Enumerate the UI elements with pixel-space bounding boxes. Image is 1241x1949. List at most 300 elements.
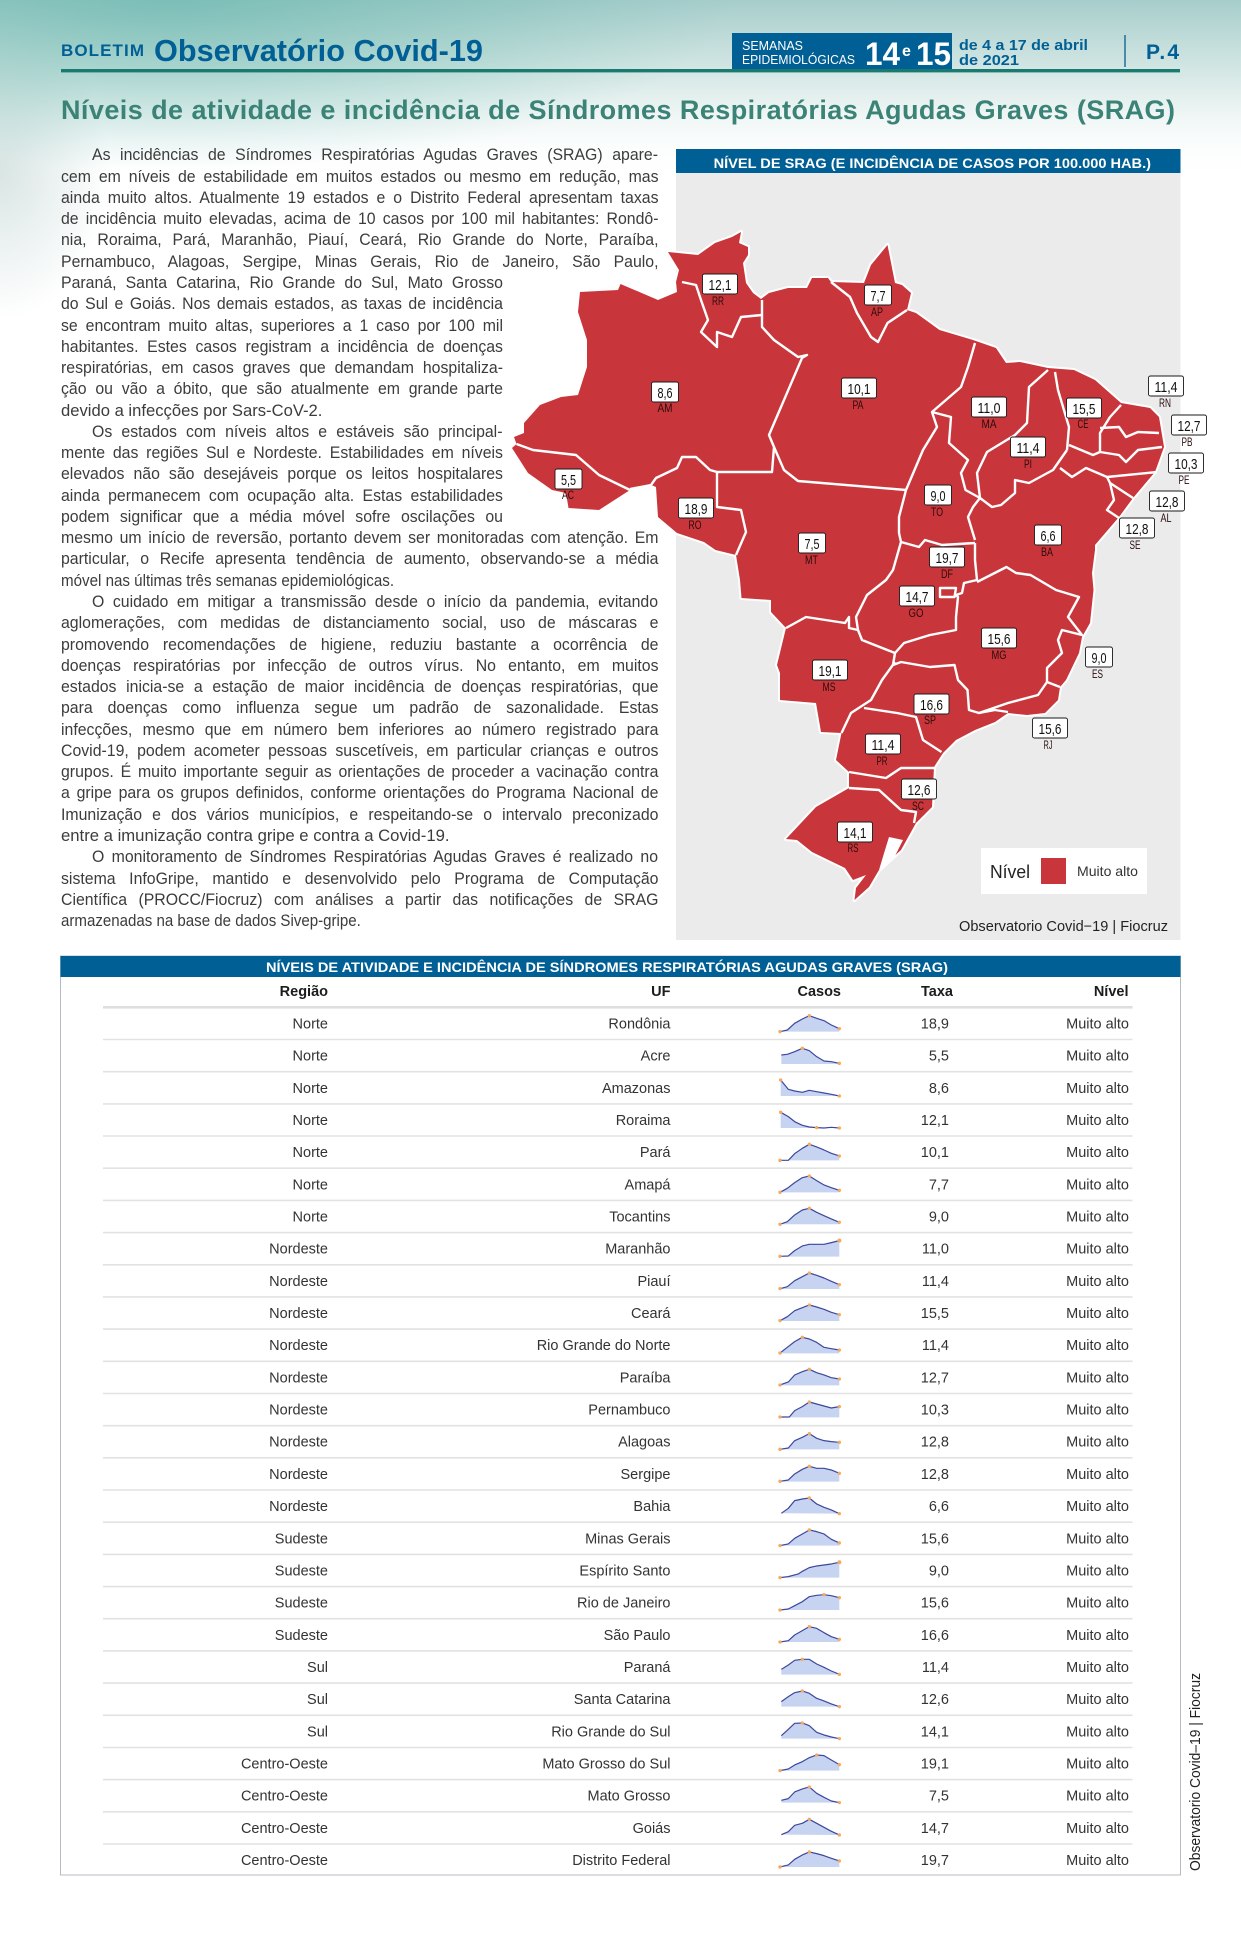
row: Acre: Acre bbox=[641, 1049, 670, 1065]
row: Goiás: Centro-Oeste bbox=[241, 1821, 328, 1837]
row: Tocantins: Tocantins bbox=[609, 1210, 670, 1226]
sparkline: Rondônia bbox=[778, 1014, 841, 1033]
row: Roraima: Roraima bbox=[616, 1113, 671, 1129]
state label: MT bbox=[798, 533, 826, 567]
body text: Pernambuco, Alagoas, Sergipe, Minas Gerais, Rio de Janeiro, São Paulo, bbox=[60, 253, 658, 271]
epidemiological weeks box: 15 bbox=[916, 36, 951, 72]
row: Alagoas bbox=[103, 1432, 1132, 1458]
body text: Imunização e dos vários municípios, e respeitando-se o intervalo preconizado bbox=[60, 806, 658, 824]
sparkline: Paraná bbox=[781, 1658, 841, 1676]
row: Pará: Pará bbox=[640, 1145, 671, 1161]
row: Roraima: Norte bbox=[293, 1113, 328, 1129]
map legend: Nível bbox=[990, 862, 1030, 882]
row: Paraná: Paraná bbox=[624, 1660, 671, 1676]
state label: PE bbox=[1168, 453, 1204, 487]
row: Paraná: 11,4 bbox=[922, 1660, 949, 1676]
sparkline: Mato Grosso do Sul bbox=[778, 1753, 841, 1772]
state label: AC: AC bbox=[562, 488, 574, 502]
row: Piauí: 11,4 bbox=[922, 1274, 949, 1290]
state label: SC bbox=[902, 779, 936, 813]
row: Rio Grande do Sul: Muito alto bbox=[1066, 1724, 1129, 1740]
body text: armazenadas na base de dados Sivep-gripe. bbox=[60, 912, 360, 930]
row: Piauí: Muito alto bbox=[1066, 1274, 1129, 1290]
row: Paraná: Muito alto bbox=[1066, 1660, 1129, 1676]
state label: RJ: 15,6 bbox=[1038, 721, 1062, 738]
sparkline: Bahia bbox=[781, 1496, 841, 1515]
row: Alagoas: Nordeste bbox=[269, 1435, 328, 1451]
body text: particular, o Recife apresenta tendência de aumento, observando-se a média bbox=[60, 550, 658, 568]
row: Maranhão bbox=[103, 1239, 1132, 1265]
masthead bbox=[61, 33, 1180, 72]
row: Amazonas: Norte bbox=[293, 1081, 328, 1097]
body text: móvel nas últimas três semanas epidemiológicas. bbox=[60, 572, 394, 590]
row: Ceará: Nordeste bbox=[269, 1306, 328, 1322]
dates bbox=[959, 37, 1088, 69]
sparkline: Paraíba bbox=[778, 1368, 841, 1387]
epidemiological weeks box: SEMANAS bbox=[742, 39, 803, 53]
row: Tocantins: 9,0 bbox=[929, 1210, 949, 1226]
body text: cem em níveis de estabilidade em muitos estados ou mesmo em redução, mas bbox=[60, 168, 658, 186]
row: Rio de Janeiro: Sudeste bbox=[275, 1596, 328, 1612]
row: Rio Grande do Sul bbox=[103, 1721, 1132, 1748]
state label: MG bbox=[982, 628, 1016, 662]
row: Minas Gerais: Muito alto bbox=[1066, 1531, 1129, 1547]
state label: AL: 12,8 bbox=[1156, 494, 1178, 511]
row: Pará: Muito alto bbox=[1066, 1145, 1129, 1161]
sparkline: Acre bbox=[781, 1047, 841, 1065]
row: Rondônia bbox=[103, 1014, 1132, 1040]
state label: AM: AM bbox=[658, 401, 673, 415]
row: São Paulo bbox=[103, 1625, 1132, 1651]
state label: RO: 18,9 bbox=[684, 501, 708, 518]
state label: PR: PR bbox=[876, 754, 888, 768]
row: Amapá bbox=[103, 1174, 1132, 1200]
state label: PR: 11,4 bbox=[872, 737, 894, 754]
state label: GO: 14,7 bbox=[906, 589, 928, 606]
state label: RN: 11,4 bbox=[1154, 379, 1178, 396]
body text: devido a infecções por Sars-CoV-2. bbox=[60, 402, 322, 420]
state label: RR bbox=[702, 274, 738, 308]
row: Minas Gerais bbox=[103, 1528, 1132, 1554]
sparkline: São Paulo bbox=[778, 1625, 841, 1644]
body text: estados inicia-se a estação de maior incidência de doenças respiratórias, que bbox=[60, 678, 658, 696]
state label: PA: 10,1 bbox=[848, 381, 870, 398]
row: Santa Catarina bbox=[103, 1689, 1132, 1715]
sparkline: Piauí bbox=[778, 1271, 841, 1290]
row: Rio Grande do Norte bbox=[103, 1336, 1132, 1361]
row: Amazonas: Muito alto bbox=[1066, 1081, 1129, 1097]
state label: RN: RN bbox=[1159, 396, 1171, 410]
state label: DF bbox=[930, 547, 964, 581]
epidemiological weeks box: EPIDEMIOLÓGICAS bbox=[742, 52, 855, 67]
state label: PE: 10,3 bbox=[1174, 456, 1198, 473]
state label: AP bbox=[864, 285, 892, 319]
row: Sergipe: 12,8 bbox=[921, 1467, 949, 1483]
row: Roraima bbox=[103, 1111, 1132, 1136]
state label: MT: MT bbox=[805, 553, 819, 567]
body text: elevados não são desejáveis porque os leitos hospitalares bbox=[60, 465, 502, 483]
row: Tocantins: Norte bbox=[293, 1210, 328, 1226]
body text: As incidências de Síndromes Respiratórias Agudas Graves (SRAG) apare- bbox=[92, 146, 658, 164]
body text: se encontram muito altas, superiores a 1 caso por 100 mil bbox=[60, 316, 502, 334]
state label: AP: 7,7 bbox=[870, 288, 886, 305]
state label: AL: AL bbox=[1160, 511, 1172, 525]
page number: P.4 bbox=[1146, 41, 1179, 64]
state label: AC bbox=[555, 469, 582, 502]
row: Rio de Janeiro bbox=[103, 1593, 1132, 1619]
body text: nia, Roraima, Pará, Maranhão, Piauí, Ceará, Rio Grande do Norte, Paraíba, bbox=[60, 231, 658, 249]
state label: RS: RS bbox=[848, 841, 858, 855]
row: Distrito Federal: 19,7 bbox=[921, 1853, 949, 1869]
row: Amazonas bbox=[103, 1078, 1132, 1104]
state label: RJ bbox=[1032, 718, 1068, 752]
body text: do Sul e Goiás. Nos demais estados, as taxas de incidência bbox=[60, 295, 502, 313]
state label: GO: GO bbox=[908, 606, 924, 620]
row: Santa Catarina: Sul bbox=[307, 1692, 328, 1708]
row: Mato Grosso: Centro-Oeste bbox=[241, 1789, 328, 1805]
sparkline: Sergipe bbox=[778, 1465, 841, 1483]
row: Rio de Janeiro: Rio de Janeiro bbox=[577, 1596, 670, 1612]
state label: CE: 15,5 bbox=[1072, 401, 1096, 418]
state label: RR: 12,1 bbox=[708, 277, 732, 294]
map legend bbox=[981, 848, 1147, 894]
dates: de 2021 bbox=[959, 52, 1019, 69]
body text: aglomerações, com medidas de distanciamento social, uso de máscaras e bbox=[60, 614, 658, 632]
sparkline: Alagoas bbox=[778, 1432, 841, 1451]
row: Acre bbox=[103, 1047, 1132, 1072]
body text: respiratórias, em casos graves que demandam hospitaliza- bbox=[60, 359, 502, 377]
row: Pernambuco: 10,3 bbox=[921, 1403, 949, 1419]
row: Paraná bbox=[103, 1658, 1132, 1683]
sparkline: Pará bbox=[778, 1143, 841, 1162]
choropleth map of Brazil bbox=[512, 232, 1206, 900]
row: Acre: Norte bbox=[293, 1049, 328, 1065]
row: Rio Grande do Norte: Muito alto bbox=[1066, 1338, 1129, 1354]
body text: Paraná, Santa Catarina, Rio Grande do Sul, Mato Grosso bbox=[60, 274, 502, 292]
row: Maranhão: Muito alto bbox=[1066, 1242, 1129, 1258]
row: Maranhão: 11,0 bbox=[922, 1242, 949, 1258]
state label: AP: AP bbox=[871, 305, 883, 319]
state label: PI bbox=[1010, 437, 1046, 471]
state label: SP bbox=[914, 694, 949, 727]
state label: PA bbox=[842, 378, 876, 412]
state label: CE bbox=[1066, 398, 1102, 431]
row: Bahia bbox=[103, 1496, 1132, 1522]
state label: TO bbox=[924, 485, 952, 519]
state label: ES: 9,0 bbox=[1092, 650, 1106, 667]
state label: ES: ES bbox=[1092, 667, 1103, 681]
epidemiological weeks box: e bbox=[902, 43, 911, 60]
state label: DF: DF bbox=[941, 567, 953, 581]
row: Tocantins bbox=[103, 1207, 1132, 1233]
sparkline: Rio Grande do Norte bbox=[778, 1336, 841, 1355]
body text: O monitoramento de Síndromes Respiratórias Agudas Graves é realizado no bbox=[92, 848, 658, 866]
table column headers: Taxa bbox=[921, 984, 954, 1000]
body text: de incidência muito elevadas, acima de 10 casos por 100 mil habitantes: Rondô- bbox=[60, 210, 658, 228]
state label: TO: TO bbox=[931, 505, 943, 519]
row: Acre: Muito alto bbox=[1066, 1049, 1129, 1065]
body text: sistema InfoGripe, mantido e desenvolvido pelo Programa de Computação bbox=[60, 870, 658, 888]
row: Rio de Janeiro: Muito alto bbox=[1066, 1596, 1129, 1612]
row: Amapá: Muito alto bbox=[1066, 1177, 1129, 1193]
page title: Níveis de atividade e incidência de Síndromes Respiratórias Agudas Graves (SRAG) bbox=[61, 95, 1175, 125]
body text: ção ou vão a óbito, que são atualmente em grande parte bbox=[60, 380, 502, 398]
state label: SC: SC bbox=[912, 799, 924, 813]
table column headers bbox=[103, 984, 1132, 1009]
row: Roraima: Muito alto bbox=[1066, 1113, 1129, 1129]
state label: MG: MG bbox=[992, 648, 1006, 662]
state label: TO: 9,0 bbox=[930, 488, 946, 505]
body text: doenças respiratórias por infecção de outros vírus. No entanto, em muitos bbox=[60, 657, 658, 675]
state label: AL bbox=[1150, 491, 1184, 525]
map legend: Muito alto bbox=[1077, 863, 1138, 879]
row: Espírito Santo: 9,0 bbox=[929, 1564, 949, 1580]
row: Pará bbox=[103, 1143, 1132, 1168]
body text: infecções, mesmo que em número bem inferiores ao número registrado para bbox=[60, 721, 658, 739]
row: Rondônia: Norte bbox=[293, 1016, 328, 1032]
state label: MS bbox=[812, 660, 848, 694]
row: Espírito Santo bbox=[103, 1560, 1132, 1587]
row: Amapá: 7,7 bbox=[929, 1177, 949, 1193]
row: Alagoas: 12,8 bbox=[921, 1435, 949, 1451]
body text: a gripe para os grupos definidos, conforme orientações do Programa Nacional de bbox=[60, 784, 658, 802]
state label: PB: PB bbox=[1182, 435, 1192, 449]
row: Rio de Janeiro: 15,6 bbox=[921, 1596, 949, 1612]
row: Distrito Federal: Centro-Oeste bbox=[241, 1853, 328, 1869]
row: Bahia: Bahia bbox=[633, 1499, 671, 1515]
sparkline: Espírito Santo bbox=[778, 1560, 841, 1579]
sparkline: Pernambuco bbox=[778, 1400, 841, 1419]
body text: habitantes. Estes casos registram a incidência de doenças bbox=[60, 338, 502, 356]
row: Espírito Santo: Sudeste bbox=[275, 1564, 328, 1580]
state label: SE bbox=[1120, 518, 1154, 552]
row: Pernambuco: Muito alto bbox=[1066, 1403, 1129, 1419]
row: Paraíba: 12,7 bbox=[921, 1370, 949, 1386]
row: Amazonas: 8,6 bbox=[929, 1081, 949, 1097]
row: São Paulo: 16,6 bbox=[921, 1628, 949, 1644]
row: Goiás bbox=[103, 1818, 1132, 1844]
body text: Covid-19, podem acometer pessoas suscetíveis, em particular crianças e outros bbox=[60, 742, 658, 760]
sparkline: Amazonas bbox=[779, 1078, 841, 1098]
state label: DF: 19,7 bbox=[936, 550, 958, 567]
country silhouette bbox=[512, 232, 1164, 900]
row: Sergipe: Muito alto bbox=[1066, 1467, 1129, 1483]
row: Roraima: 12,1 bbox=[921, 1113, 949, 1129]
row: Mato Grosso do Sul: 19,1 bbox=[921, 1756, 949, 1772]
header background bbox=[0, 0, 1241, 340]
table heading: NÍVEIS DE ATIVIDADE E INCIDÊNCIA DE SÍNDROMES RESPIRATÓRIAS AGUDAS GRAVES (SRAG) bbox=[266, 958, 948, 975]
row: Ceará: 15,5 bbox=[921, 1306, 949, 1322]
state label: AM bbox=[652, 382, 678, 415]
sparkline: Maranhão bbox=[778, 1239, 841, 1258]
sparkline: Minas Gerais bbox=[778, 1528, 841, 1547]
sparkline: Tocantins bbox=[778, 1207, 841, 1226]
row: Amazonas: Amazonas bbox=[602, 1081, 670, 1097]
table column headers: UF bbox=[651, 984, 671, 1000]
state label: RJ: RJ bbox=[1044, 738, 1052, 752]
row: Goiás: Muito alto bbox=[1066, 1821, 1129, 1837]
row: Espírito Santo: Espírito Santo bbox=[579, 1564, 670, 1580]
sparkline: Rio Grande do Sul bbox=[781, 1721, 841, 1740]
state label: BA: 6,6 bbox=[1040, 528, 1056, 545]
bulletin name: Observatório Covid-19 bbox=[154, 33, 483, 68]
sparkline: Ceará bbox=[778, 1303, 841, 1322]
row: Rio Grande do Sul: Rio Grande do Sul bbox=[551, 1724, 670, 1740]
epidemiological weeks box bbox=[732, 33, 952, 72]
state label: PA: PA bbox=[852, 398, 864, 412]
body text: mente das regiões Sul e Nordeste. Estabilidades em níveis bbox=[60, 444, 502, 462]
row: Rondônia: Rondônia bbox=[608, 1016, 671, 1032]
row: Amapá: Norte bbox=[293, 1177, 328, 1193]
body text: podem significar que a média móvel sofre oscilações ou bbox=[60, 508, 502, 526]
sparkline: Mato Grosso bbox=[781, 1785, 841, 1804]
state label: PE: PE bbox=[1178, 473, 1190, 487]
row: Pará: 10,1 bbox=[921, 1145, 949, 1161]
row: Pernambuco: Pernambuco bbox=[588, 1403, 670, 1419]
row: São Paulo: Muito alto bbox=[1066, 1628, 1129, 1644]
row: Santa Catarina: 12,6 bbox=[921, 1692, 949, 1708]
table column headers: Nível bbox=[1094, 984, 1128, 1000]
body text: ainda permanecem com ocupação alta. Estas estabilidades bbox=[60, 487, 502, 505]
row: Goiás: 14,7 bbox=[921, 1821, 949, 1837]
row: Pernambuco bbox=[103, 1400, 1132, 1426]
row: Rio Grande do Sul: 14,1 bbox=[921, 1724, 949, 1740]
row: Paraíba: Nordeste bbox=[269, 1370, 328, 1386]
lagoon bbox=[879, 837, 903, 870]
row: Paraíba bbox=[103, 1368, 1132, 1394]
row: Mato Grosso: Mato Grosso bbox=[588, 1789, 670, 1805]
row: Piauí bbox=[103, 1271, 1132, 1297]
body text: para doenças como influenza segue um padrão de sazonalidade. Estas bbox=[60, 699, 658, 717]
state label: SE: 12,8 bbox=[1126, 521, 1148, 538]
row: Amapá: Amapá bbox=[625, 1177, 671, 1193]
body text: ainda muito altos. Atualmente 19 estados e o Distrito Federal apresentam taxas bbox=[60, 189, 658, 207]
row: Mato Grosso: 7,5 bbox=[929, 1789, 949, 1805]
row: Rio Grande do Norte: Rio Grande do Norte bbox=[537, 1338, 670, 1354]
sparkline: Amapá bbox=[778, 1174, 841, 1194]
body text: mesmo um início de reversão, portanto devem ser monitoradas com atenção. Em bbox=[60, 529, 658, 547]
row: Sergipe: Sergipe bbox=[621, 1467, 670, 1483]
state label: MT: 7,5 bbox=[804, 536, 820, 553]
row: São Paulo: Sudeste bbox=[275, 1628, 328, 1644]
state label: PI: PI bbox=[1024, 457, 1032, 471]
row: Piauí: Nordeste bbox=[269, 1274, 328, 1290]
body text: promovendo recomendações de higiene, reduziu bastante a ocorrência de bbox=[60, 636, 658, 654]
state label: MS: MS bbox=[822, 680, 836, 694]
state label: MA bbox=[972, 397, 1006, 431]
state label: CE: CE bbox=[1078, 417, 1088, 431]
table source (vertical): Observatorio Covid–19 | Fiocruz bbox=[1188, 1673, 1204, 1871]
sparkline: Rio de Janeiro bbox=[778, 1593, 841, 1612]
row: Sergipe bbox=[103, 1465, 1132, 1490]
row: Santa Catarina: Muito alto bbox=[1066, 1692, 1129, 1708]
row: Rio Grande do Sul: Sul bbox=[307, 1724, 328, 1740]
row: Distrito Federal: Muito alto bbox=[1066, 1853, 1129, 1869]
panel: table frame bbox=[60, 956, 1180, 1875]
state label: MA: 11,0 bbox=[978, 400, 1000, 417]
state label: RR: RR bbox=[712, 294, 724, 308]
state label: RO: RO bbox=[688, 518, 702, 532]
bulletin label: BOLETIM bbox=[61, 41, 144, 60]
row: Santa Catarina: Santa Catarina bbox=[574, 1692, 671, 1708]
body text: entre a imunização contra gripe e contra a Covid-19. bbox=[60, 827, 449, 845]
body text: Os estados com níveis altos e estáveis são principal- bbox=[92, 423, 502, 441]
row: Bahia: Muito alto bbox=[1066, 1499, 1129, 1515]
row: Rio Grande do Norte: Nordeste bbox=[269, 1338, 328, 1354]
dates: de 4 a 17 de abril bbox=[959, 37, 1088, 54]
row: São Paulo: São Paulo bbox=[604, 1628, 670, 1644]
row: Tocantins: Muito alto bbox=[1066, 1210, 1129, 1226]
row: Rondônia: Muito alto bbox=[1066, 1016, 1129, 1032]
row: Minas Gerais: Minas Gerais bbox=[585, 1531, 670, 1547]
row: Paraíba: Muito alto bbox=[1066, 1370, 1129, 1386]
row: Bahia: Nordeste bbox=[269, 1499, 328, 1515]
state label: ES bbox=[1086, 647, 1112, 681]
row: Ceará bbox=[103, 1303, 1132, 1329]
row: Pará: Norte bbox=[293, 1145, 328, 1161]
table column headers: Região bbox=[280, 984, 328, 1000]
row: Mato Grosso do Sul: Mato Grosso do Sul bbox=[542, 1756, 670, 1772]
row: Pernambuco: Nordeste bbox=[269, 1403, 328, 1419]
body text: O cuidado em mitigar a transmissão desde o início da pandemia, evitando bbox=[92, 593, 658, 611]
row: Mato Grosso do Sul bbox=[103, 1753, 1132, 1780]
state label: RS: 14,1 bbox=[844, 825, 866, 842]
row: Piauí: Piauí bbox=[637, 1274, 670, 1290]
state label: GO bbox=[900, 586, 934, 620]
row: Paraíba: Paraíba bbox=[620, 1370, 671, 1386]
row: Mato Grosso: Muito alto bbox=[1066, 1789, 1129, 1805]
panel: map background bbox=[676, 149, 1180, 940]
row: Alagoas: Alagoas bbox=[618, 1435, 670, 1451]
state label: AM: 8,6 bbox=[658, 385, 672, 402]
table column headers: Casos bbox=[797, 984, 841, 1000]
state label: BA bbox=[1034, 525, 1062, 559]
row: Mato Grosso do Sul: Centro-Oeste bbox=[241, 1756, 328, 1772]
body text bbox=[60, 146, 658, 930]
row: Goiás: Goiás bbox=[633, 1821, 670, 1837]
state label: MS: 19,1 bbox=[818, 663, 842, 680]
state label: AC: 5,5 bbox=[561, 472, 576, 489]
state label: RO bbox=[678, 498, 714, 532]
row: Ceará: Muito alto bbox=[1066, 1306, 1129, 1322]
row: Ceará: Ceará bbox=[631, 1306, 671, 1322]
state label: SC: 12,6 bbox=[908, 782, 930, 799]
state label: PB: 12,7 bbox=[1178, 418, 1200, 435]
state label: SE: SE bbox=[1130, 538, 1140, 552]
epidemiological weeks box: 14 bbox=[865, 36, 900, 72]
state label: PI: 11,4 bbox=[1016, 440, 1040, 457]
state label: BA: BA bbox=[1041, 545, 1053, 559]
body text: grupos. É muito importante seguir as orientações de proceder a vacinação contra bbox=[60, 763, 658, 781]
state label: SP: SP bbox=[924, 713, 936, 727]
row: Distrito Federal: Distrito Federal bbox=[572, 1853, 670, 1869]
row: Bahia: 6,6 bbox=[929, 1499, 949, 1515]
row: Alagoas: Muito alto bbox=[1066, 1435, 1129, 1451]
sparkline: Goiás bbox=[781, 1818, 841, 1837]
state label: SP: 16,6 bbox=[920, 697, 943, 714]
state label: MA: MA bbox=[982, 417, 996, 431]
row: Mato Grosso bbox=[103, 1785, 1132, 1812]
state label: PR bbox=[866, 734, 900, 768]
sparkline: Santa Catarina bbox=[781, 1689, 841, 1708]
map source: Observatorio Covid−19 | Fiocruz bbox=[959, 919, 1168, 935]
row: Acre: 5,5 bbox=[929, 1049, 949, 1065]
sparkline: Distrito Federal bbox=[778, 1850, 841, 1869]
row: Maranhão: Nordeste bbox=[269, 1242, 328, 1258]
state borders bbox=[516, 282, 1162, 823]
state label: PB bbox=[1172, 415, 1206, 449]
sparkline: Roraima bbox=[779, 1111, 841, 1130]
